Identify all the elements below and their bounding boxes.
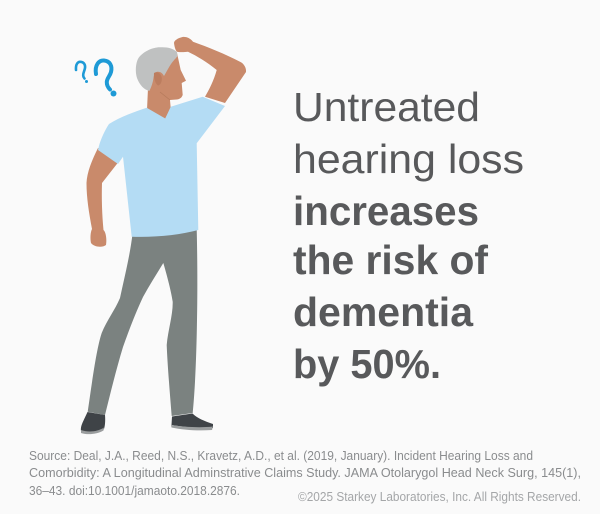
left shoe [81,412,105,433]
right shoe [172,414,213,428]
heading line: hearing loss: hearing loss [293,136,524,182]
gray hair [136,47,177,91]
heading line: dementia: dementia [293,289,474,335]
icon: question marks [76,60,116,96]
neck and face [147,53,186,119]
hanging arm and fist [86,148,120,247]
citation line 3: 36–43. doi:10.1001/jamaoto.2018.2876. [29,484,240,498]
jaw line [160,92,170,100]
heading line: Untreated: Untreated [293,84,480,130]
ear [154,72,162,86]
citation line 1: Source: Deal, J.A., Reed, N.S., Kravetz, A.D., et al. (2019, January). Incident Hearing Loss and [29,449,533,463]
heading line: the risk of: the risk of [293,237,488,283]
shirt [98,97,225,237]
copyright: ©2025 Starkey Laboratories, Inc. All Rights Reserved. [298,490,581,504]
illustration: confused man scratching his head [76,37,246,434]
citation line 2: Comorbidity: A Longitudinal Adminstrative Claims Study. JAMA Otolarygol Head Neck Surg, 145(1), [29,466,581,480]
heading [293,84,524,387]
raised arm and hand [174,37,246,103]
pants [88,229,197,416]
heading line: increases: increases [293,188,479,234]
source citation [29,449,581,498]
heading line: by 50%: by 50%. [293,341,441,387]
